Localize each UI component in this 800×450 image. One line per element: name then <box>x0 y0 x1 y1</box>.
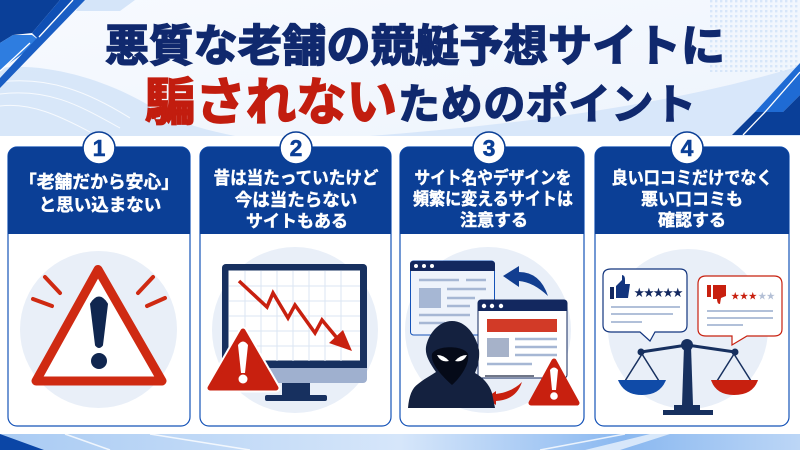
good review bubble: ★★★★★ <box>634 287 684 299</box>
heading 1 <box>19 172 179 215</box>
icon: monitor with falling chart <box>210 247 378 413</box>
panel 2 <box>200 132 391 426</box>
number badge 1 <box>83 132 115 164</box>
heading 3 <box>413 168 573 230</box>
header band 3 <box>400 147 584 234</box>
top-left corner shapes <box>0 0 60 43</box>
heading 1: と思い込まない <box>39 195 161 215</box>
number badge 2: 2 <box>290 135 302 161</box>
panel 1 <box>8 132 190 426</box>
back browser window <box>410 261 495 335</box>
heading 4: 確認する <box>658 211 726 230</box>
title line 2: 騙されない <box>145 74 397 131</box>
heading 4: 悪い口コミも <box>641 190 743 209</box>
front browser window <box>478 300 567 378</box>
blue arrow <box>503 266 548 296</box>
heading 2: サイトもある <box>246 212 348 231</box>
number badge 4 <box>671 132 703 164</box>
number badge 4: 4 <box>681 135 694 161</box>
red arrow <box>486 382 522 405</box>
heading 2: 昔は当たっていたけど <box>214 168 379 188</box>
footer band <box>0 434 800 450</box>
title <box>105 22 725 131</box>
hooded figure <box>408 321 495 408</box>
title line 2 <box>145 74 696 131</box>
icon: warning triangle <box>20 251 177 408</box>
icon: scale with reviews <box>603 249 782 415</box>
bad review bubble: ★★★ <box>731 291 757 301</box>
heading 3: 頻繁に変えるサイトは <box>413 189 573 209</box>
top-right corner shapes <box>732 112 765 135</box>
header band 1 <box>8 147 190 234</box>
icon: hooded figure and changing sites <box>405 247 577 413</box>
panel 4 <box>595 132 789 426</box>
warning triangle <box>531 361 577 403</box>
title: 悪質な老舗の競艇予想サイトに <box>105 22 725 71</box>
heading 2: 今は当たらない <box>235 190 357 210</box>
heading 2 <box>214 168 379 231</box>
bad review bubble <box>698 276 782 345</box>
heading 4 <box>612 168 772 230</box>
number badge 3: 3 <box>483 135 495 161</box>
number badge 1: 1 <box>93 135 106 161</box>
bad review bubble: ★★ <box>758 291 775 301</box>
good review bubble <box>603 269 687 341</box>
heading 3: サイト名やデザインを <box>414 168 572 188</box>
header background <box>0 0 800 136</box>
heading 4: 良い口コミだけでなく <box>612 168 772 188</box>
number badge 3 <box>473 132 505 164</box>
title line 2: ためのポイント <box>398 81 696 128</box>
heading 3: 注意する <box>460 211 528 230</box>
header band 2 <box>200 147 391 234</box>
header band 4 <box>595 147 789 234</box>
number badge 2 <box>280 132 312 164</box>
balance scale <box>618 339 758 415</box>
panel 3 <box>400 132 584 426</box>
heading 1: 「老舗だから安心」 <box>19 172 179 192</box>
